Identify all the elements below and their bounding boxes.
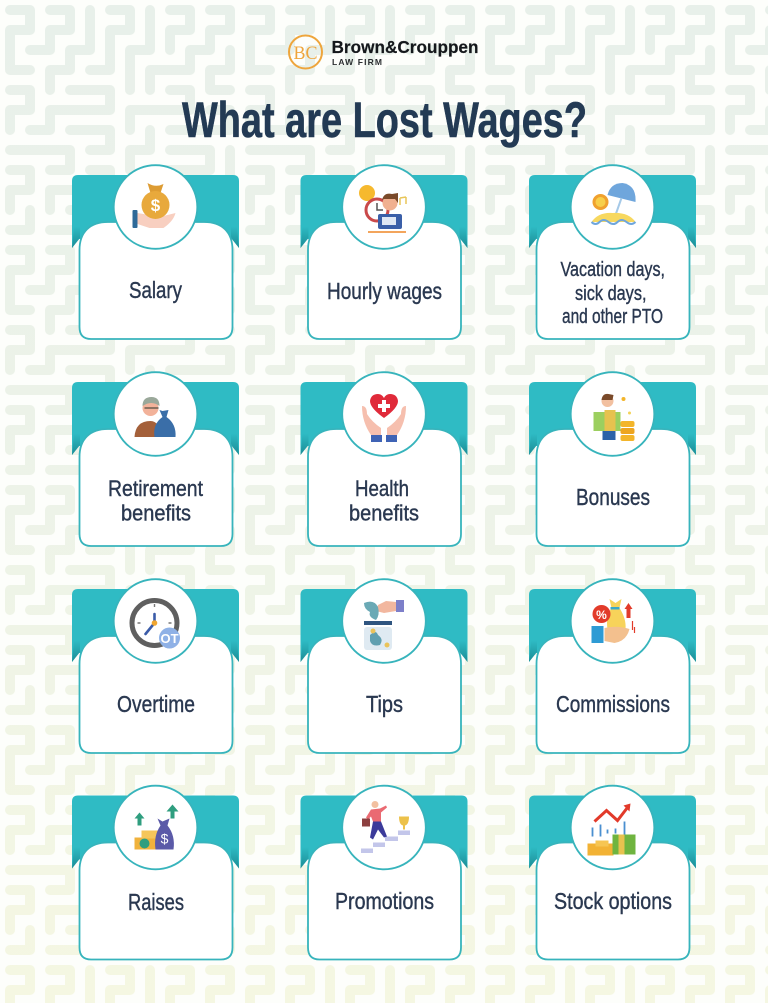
title: What are Lost Wages? xyxy=(182,92,587,148)
label: Promotions: Promotions xyxy=(335,888,434,914)
card: Overtime xyxy=(72,579,239,753)
label: Stock options: Stock options xyxy=(554,888,672,914)
label: Vacation days, sick days, and other PTO xyxy=(560,258,665,328)
card: Vacation days xyxy=(529,165,696,339)
icon: money bag in hand xyxy=(132,183,176,228)
label: Bonuses: Bonuses xyxy=(576,484,650,510)
icon: man with cash and coins xyxy=(594,394,634,441)
icon: hand dropping tip into jar xyxy=(364,600,404,650)
icon: person climbing stairs to trophy xyxy=(361,801,410,853)
icon: money with up arrows xyxy=(134,804,178,850)
icon: percent, bag and arrow: % xyxy=(596,608,607,622)
icon: percent, bag and arrow xyxy=(592,599,634,643)
icon: money bag in hand: $ xyxy=(151,196,161,215)
card: Salary xyxy=(72,165,239,339)
label: Vacation days, sick days, and other PTO: sick days, xyxy=(575,282,646,305)
card: Tips xyxy=(300,579,468,753)
logo: BC xyxy=(294,43,318,64)
card: Promotions xyxy=(300,786,468,960)
icon: clock with OT badge: OT xyxy=(160,631,179,646)
label: Retirement benefits: Retirement xyxy=(108,476,203,501)
card: Bonuses xyxy=(529,372,696,546)
logo xyxy=(289,36,478,68)
icon: money with up arrows: $ xyxy=(161,830,169,846)
icon: retiree with money bag xyxy=(134,397,176,437)
icon: beach umbrella and sun xyxy=(592,183,636,224)
icon: rising chart with money xyxy=(588,804,636,856)
label: Vacation days, sick days, and other PTO: and other PTO xyxy=(562,305,663,328)
card: Health benefits xyxy=(300,372,468,546)
label: Retirement benefits xyxy=(108,476,203,526)
label: Health benefits xyxy=(349,476,419,526)
card: Stock options xyxy=(529,786,696,960)
card: Commissions xyxy=(529,579,696,753)
label: Health benefits: Health xyxy=(355,476,409,501)
icon: clock with OT badge xyxy=(132,600,180,648)
label: Vacation days, sick days, and other PTO: Vacation days, xyxy=(560,258,665,281)
label: Health benefits: benefits xyxy=(349,500,419,526)
logo: Brown&Crouppen xyxy=(332,37,478,57)
label: Retirement benefits: benefits xyxy=(121,500,191,526)
label: Raises: Raises xyxy=(128,889,184,915)
label: Tips: Tips xyxy=(366,691,403,717)
card: Retirement benefits xyxy=(72,372,239,546)
label: Salary: Salary xyxy=(129,277,182,303)
label: Hourly wages: Hourly wages xyxy=(327,278,442,304)
card: Raises xyxy=(72,786,239,960)
icon: hands holding heart xyxy=(362,394,406,442)
label: Commissions: Commissions xyxy=(556,691,670,717)
label: Overtime: Overtime xyxy=(117,691,195,717)
logo: LAW FIRM xyxy=(332,57,382,67)
card: Hourly wages xyxy=(300,165,468,339)
icon: worker with clock and laptop xyxy=(359,185,406,233)
